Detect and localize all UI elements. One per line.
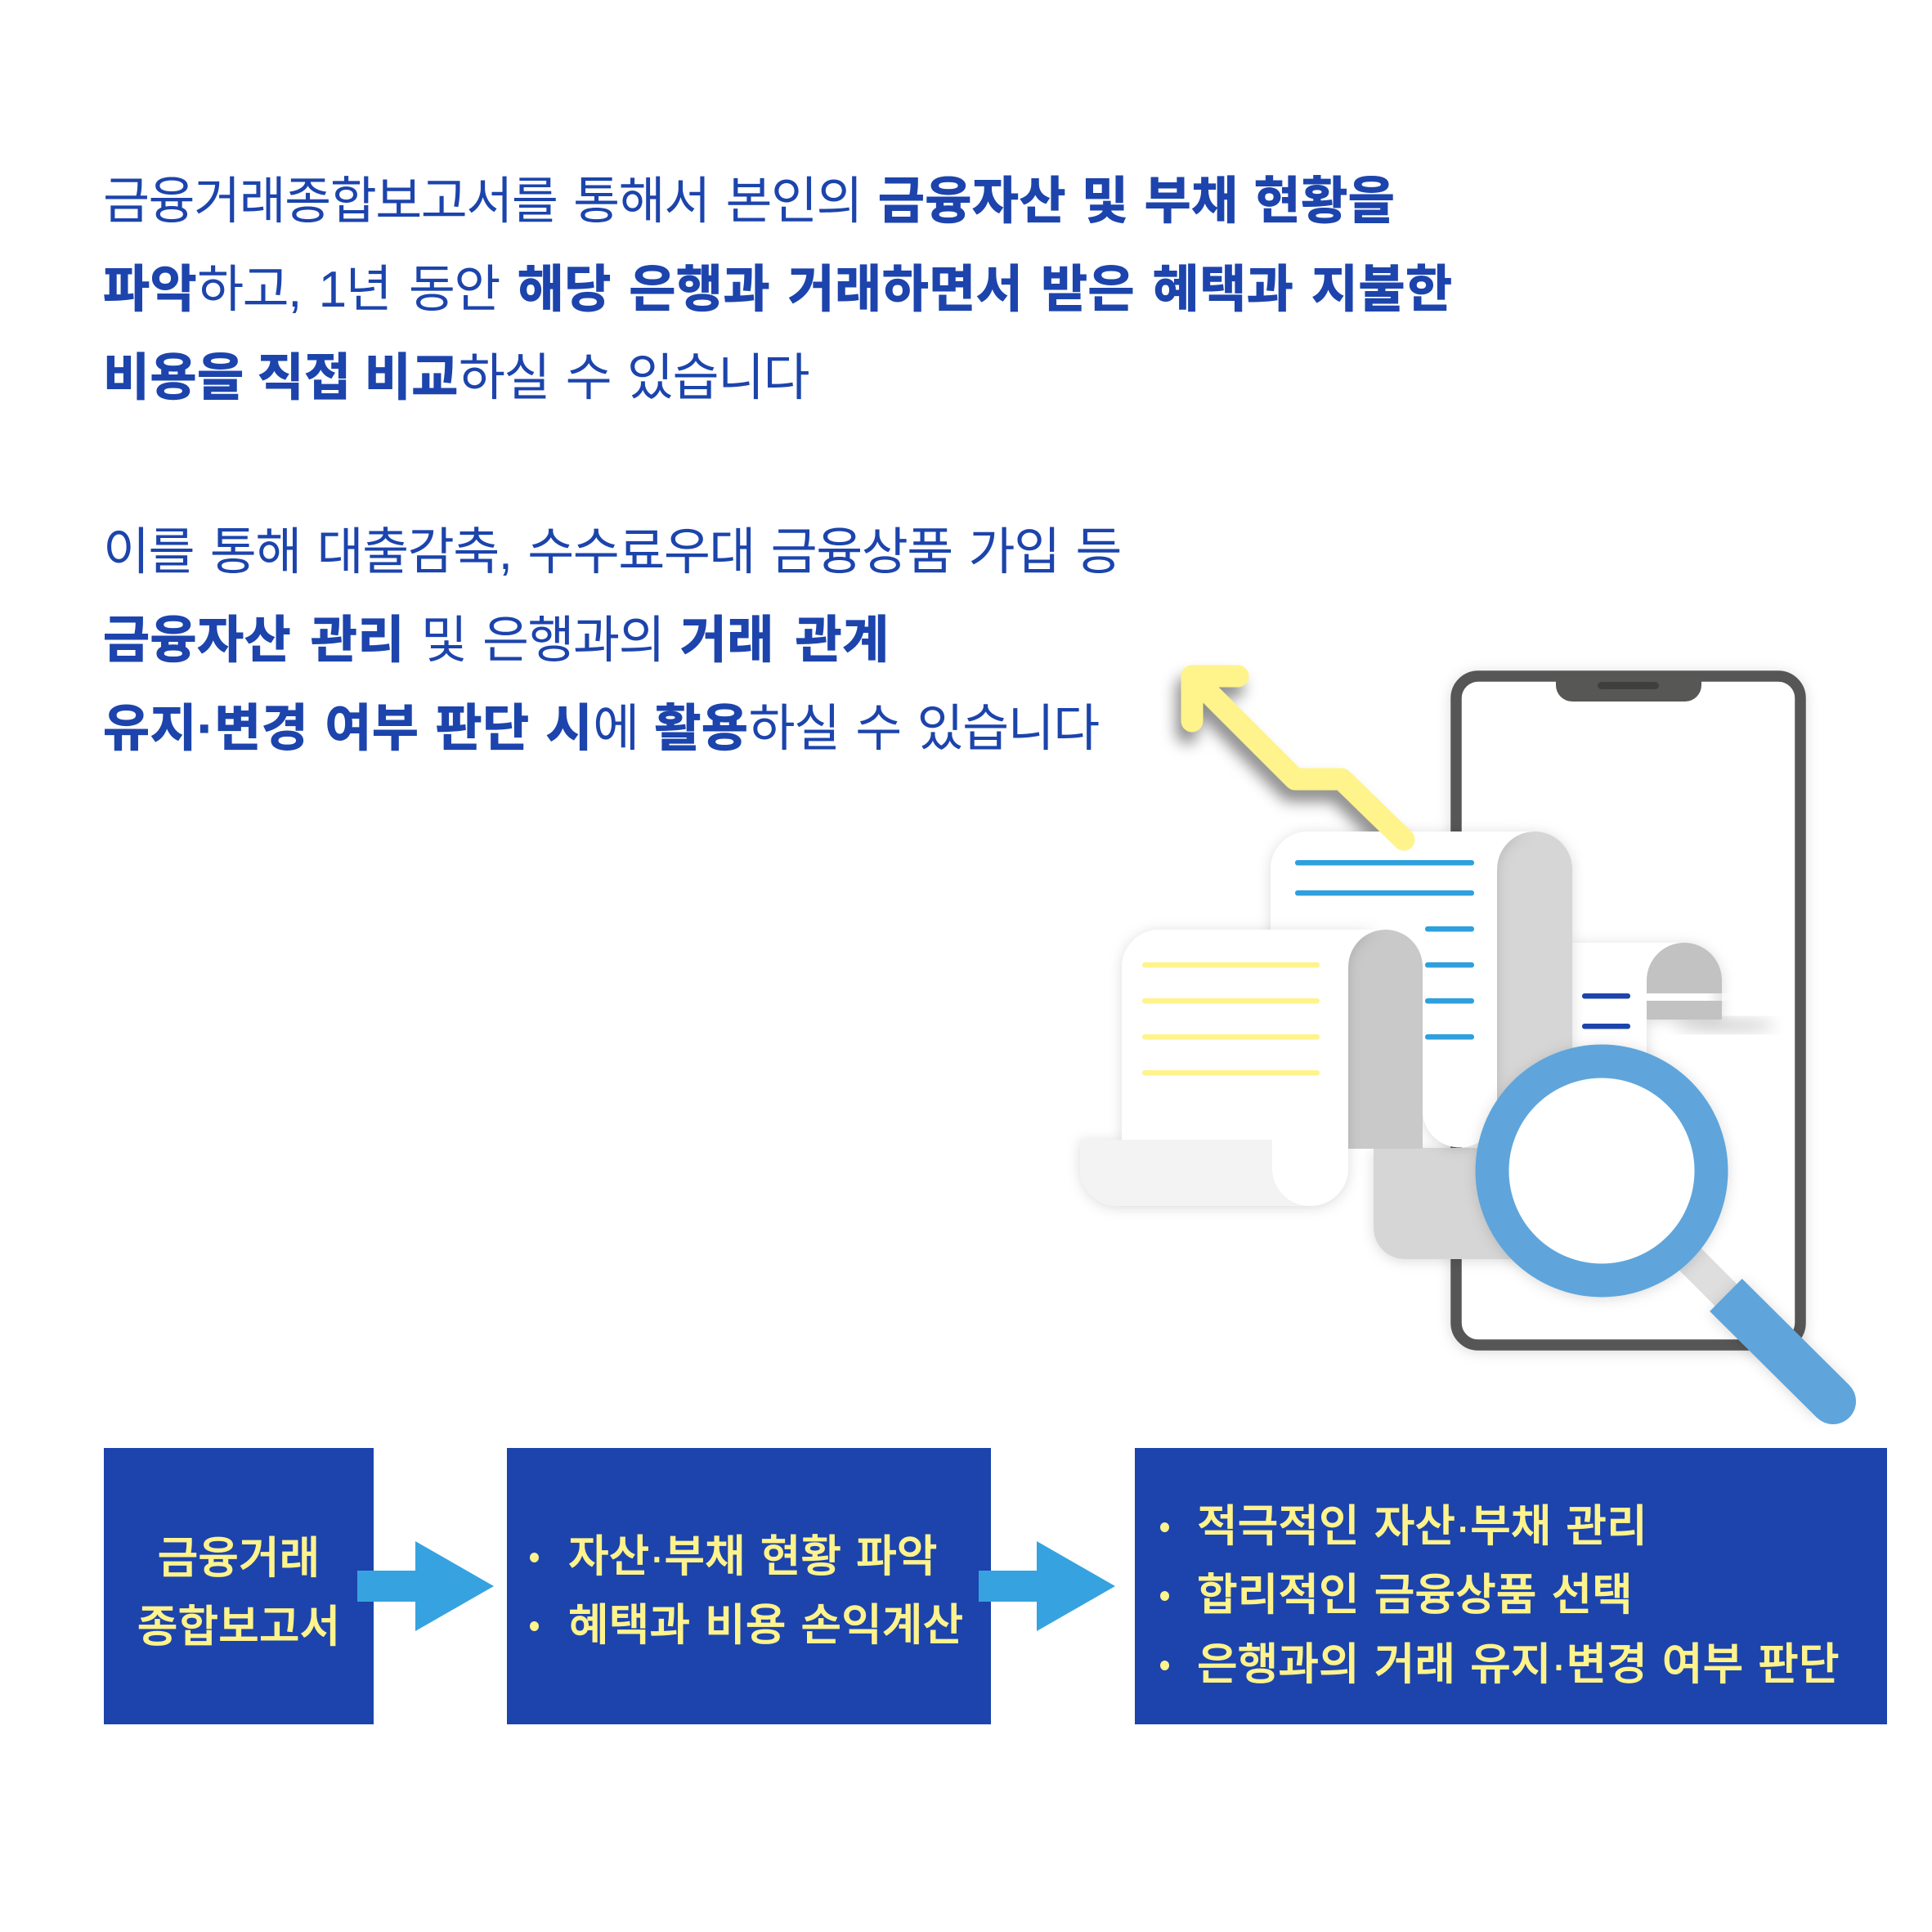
icon: front receipt xyxy=(1080,930,1423,1206)
label: analysis bullets: 자산·부채 현황 파악 xyxy=(568,1532,937,1581)
label: outcome bullets: 합리적인 금융상품 선택 xyxy=(1197,1570,1633,1619)
label: 금융거래 종합보고서 xyxy=(137,1534,340,1652)
label: 금융거래 종합보고서: 금융거래 xyxy=(158,1534,320,1583)
line 6: 유지·변경 여부 판단 시에 활용하실 수 있습니다 xyxy=(103,701,1099,757)
label: 금융거래 종합보고서: 종합보고서 xyxy=(137,1603,340,1652)
panel: analysis box xyxy=(507,1448,991,1724)
label: outcome bullets: 적극적인 자산·부채 관리 xyxy=(1197,1501,1647,1550)
icon: small receipt at right xyxy=(1572,943,1776,1145)
text block: intro paragraph 1 xyxy=(103,173,1453,406)
line 4: 이를 통해 대출감축, 수수료우대 금융상품 가입 등 xyxy=(103,524,1121,580)
arrow: analysis to outcome xyxy=(979,1541,1115,1631)
icon: rising arrow shadow xyxy=(1187,688,1399,851)
icon: smartphone xyxy=(1456,676,1800,1345)
line 1: 금융거래종합보고서를 통해서 본인의 금융자산 및 부채 현황을 xyxy=(103,173,1395,230)
line 2: 파악하고, 1년 동안 해당 은행과 거래하면서 받은 혜택과 지불한 xyxy=(103,262,1453,318)
bullet 2 xyxy=(1160,1570,1633,1619)
panel: outcome box xyxy=(1135,1448,1887,1724)
bullet 3 xyxy=(1160,1640,1840,1689)
label: outcome bullets: 은행과의 거래 유지·변경 여부 판단 xyxy=(1197,1640,1840,1689)
label: analysis bullets xyxy=(530,1532,963,1650)
icon: magnifying glass xyxy=(1492,1061,1856,1424)
icon: center receipt xyxy=(1271,832,1572,1259)
bullet 1 xyxy=(1160,1501,1647,1550)
icon: rising arrow stroke xyxy=(1192,676,1404,840)
arrow: report to analysis xyxy=(357,1541,494,1631)
bullet 2 xyxy=(530,1601,963,1650)
line 5: 금융자산 관리 및 은행과의 거래 관계 xyxy=(103,612,890,669)
bullet 1 xyxy=(530,1532,937,1581)
label: outcome bullets xyxy=(1160,1501,1840,1689)
text block: intro paragraph 2 xyxy=(103,524,1121,757)
label: analysis bullets: 혜택과 비용 손익계산 xyxy=(568,1601,963,1650)
line 3: 비용을 직접 비교하실 수 있습니다 xyxy=(103,350,809,406)
panel: report box xyxy=(104,1448,374,1724)
